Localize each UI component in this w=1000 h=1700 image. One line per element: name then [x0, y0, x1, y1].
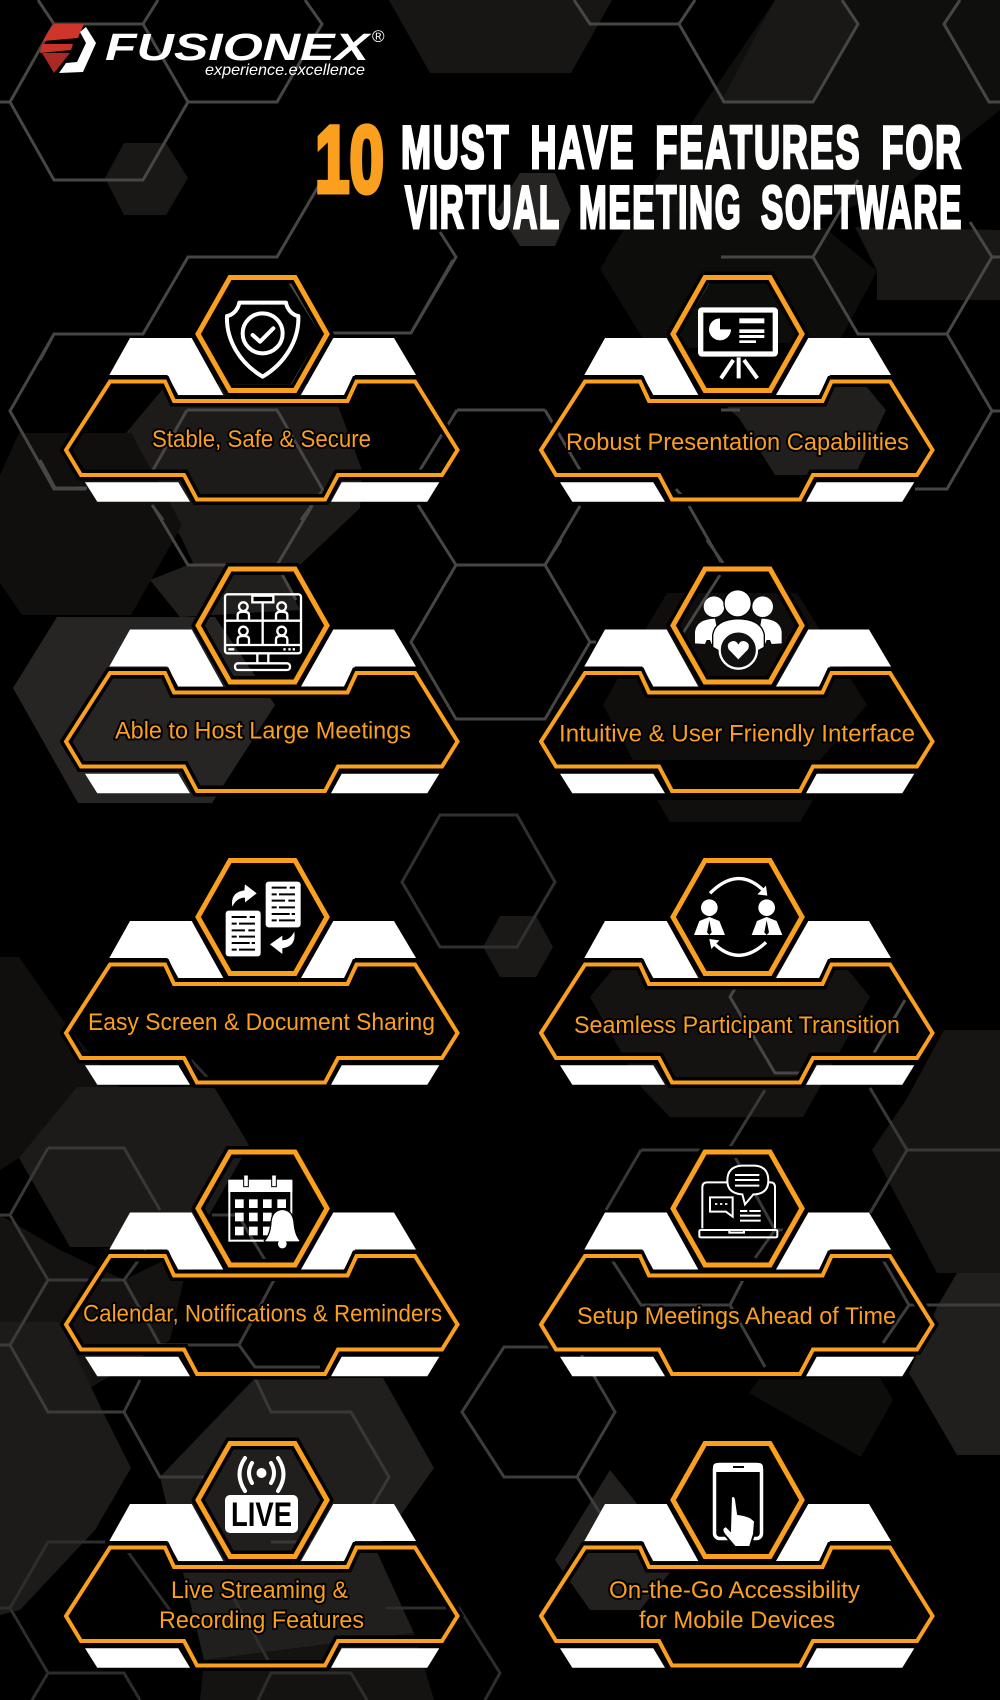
icon: presentation board	[701, 310, 775, 378]
logo mark	[40, 24, 96, 73]
label	[159, 1577, 364, 1634]
icon: video conference monitor	[225, 594, 301, 670]
title	[315, 107, 963, 241]
card: Seamless Participant Transition	[541, 860, 932, 1085]
icon: smartphone with pointing hand	[713, 1463, 763, 1547]
icon: shield with check	[227, 303, 298, 377]
label: for Mobile Devices	[639, 1607, 835, 1634]
label: Recording Features	[159, 1607, 364, 1634]
label: On-the-Go Accessibility	[609, 1577, 861, 1604]
label: Setup Meetings Ahead of Time	[577, 1303, 896, 1330]
icon: laptop with chat bubbles	[699, 1166, 777, 1237]
icon: live broadcast: LIVE	[231, 1496, 292, 1534]
card: Calendar, Notifications & Reminders	[66, 1152, 458, 1376]
icon: documents and arrows	[226, 882, 301, 956]
card: Robust Presentation Capabilities	[541, 278, 932, 502]
card: Easy Screen & Document Sharing	[66, 860, 458, 1085]
card: On-the-Go Accessibility for Mobile Devices	[541, 1444, 932, 1668]
icon: participants exchanging	[694, 879, 782, 955]
label: Easy Screen & Document Sharing	[88, 1009, 435, 1036]
card: Setup Meetings Ahead of Time	[541, 1152, 932, 1376]
card: Live Streaming & Recording Features	[66, 1444, 458, 1668]
label: Calendar, Notifications & Reminders	[83, 1300, 442, 1328]
label: Able to Host Large Meetings	[115, 718, 411, 744]
card: Stable, Safe & Secure	[66, 278, 458, 502]
icon: calendar with bell	[228, 1175, 300, 1248]
card: Able to Host Large Meetings	[66, 569, 458, 793]
logo tagline: experience.excellence	[205, 62, 365, 79]
icon: live broadcast	[225, 1458, 298, 1534]
label: Intuitive & User Friendly Interface	[559, 720, 915, 748]
label: Live Streaming &	[171, 1577, 348, 1604]
logo registered mark: ®	[372, 27, 385, 46]
logo wordmark: FUSIONEX	[105, 27, 373, 69]
card: Intuitive & User Friendly Interface	[541, 569, 932, 793]
title number 10: 10	[315, 107, 384, 213]
label: Stable, Safe & Secure	[152, 426, 371, 453]
icon: users with heart	[695, 590, 782, 669]
logo: Fusionex	[40, 24, 385, 79]
label: Robust Presentation Capabilities	[566, 429, 909, 456]
label	[609, 1577, 861, 1634]
label: Seamless Participant Transition	[574, 1012, 900, 1039]
